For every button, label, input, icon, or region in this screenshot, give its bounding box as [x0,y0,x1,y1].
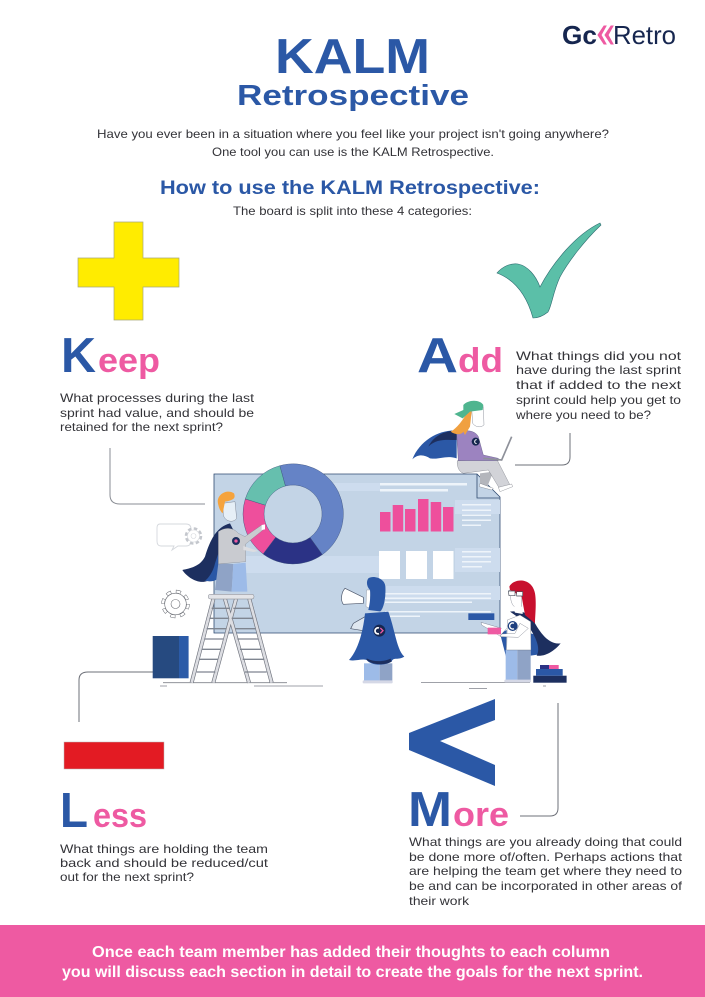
shirt [218,525,265,564]
icon: yellow plus [78,222,179,320]
less heading [60,784,147,838]
less description [60,842,269,884]
keep heading: K [61,329,96,383]
panel: keep [60,329,255,434]
logo: GoRetro [562,20,676,50]
less description: back and should be reduced/cut [60,856,269,870]
logo: GoRetro: Gc [562,20,597,50]
sub heading: The board is split into these 4 categories: [233,204,472,218]
panel: more [408,783,683,908]
panel: add [417,329,682,422]
intro text: One tool you can use is the KALM Retrospective. [212,145,494,159]
white cards [379,551,454,579]
blue box [153,636,189,678]
title [237,30,469,112]
icon: blue less-than sign [409,699,495,786]
title: KALM [275,30,430,84]
add description [515,349,682,422]
book stack [533,665,567,683]
keep heading: eep [98,342,160,380]
bar chart [380,499,454,532]
connector: keep [110,448,205,504]
illustration: team at board [153,401,567,688]
icon: speech bubble [157,524,191,550]
less heading: ess [93,797,147,835]
add description: sprint could help you get to [516,393,681,407]
character: man with megaphone [342,577,404,683]
add description: that if added to the next [516,378,682,392]
more description: be done more of/often. Perhaps actions that [409,850,683,864]
add description: where you need to be? [515,408,651,422]
head [223,502,237,521]
footer banner [0,925,705,997]
trousers [215,563,233,592]
intro text [97,127,609,159]
panel: less [60,784,269,884]
character: woman sitting on board [412,401,513,492]
keep description [60,391,255,434]
more description: be and can be incorporated in other areas of [409,879,683,893]
logo: GoRetro: Retro [613,20,676,50]
footer banner: Once each team member has added their thoughts to each column [92,944,610,961]
footer banner: you will discuss each section in detail to create the goals for the next sprint. [62,964,643,981]
donut chart [243,464,343,564]
icon: red minus [64,742,164,769]
less description: out for the next sprint? [60,870,194,884]
icon: teal check mark [497,223,601,318]
add description: What things did you not [516,349,682,363]
connector: less [79,672,160,722]
character: woman with books [468,581,561,682]
keep description: What processes during the last [60,391,255,405]
icon: gear [163,592,188,616]
keep description: retained for the next sprint? [60,420,223,434]
cape [182,523,233,582]
more description [409,835,683,908]
more description: their work [409,894,470,908]
connector: add [515,433,570,465]
more heading: M [408,783,452,837]
icon: small gear [186,528,201,544]
more heading: ore [453,796,509,834]
add heading: A [417,329,458,383]
connector: more [520,703,558,816]
title: Retrospective [237,80,469,112]
more description: What things are you already doing that could [409,835,682,849]
keep description: sprint had value, and should be [60,406,254,420]
intro text: Have you ever been in a situation where you feel like your project isn't going anywhere? [97,127,609,141]
keep heading [61,329,160,383]
less description: What things are holding the team [60,842,268,856]
more heading [408,783,509,837]
less heading: L [60,784,88,838]
more description: are helping the team get where they need to [409,864,682,878]
add heading [417,329,503,383]
board [214,474,500,633]
character: man on ladder [182,492,272,683]
floor lines [160,682,546,688]
add heading: dd [458,342,503,380]
section heading: How to use the KALM Retrospective: [160,177,540,199]
ladder [192,594,272,683]
add description: have during the last sprint [516,363,682,377]
